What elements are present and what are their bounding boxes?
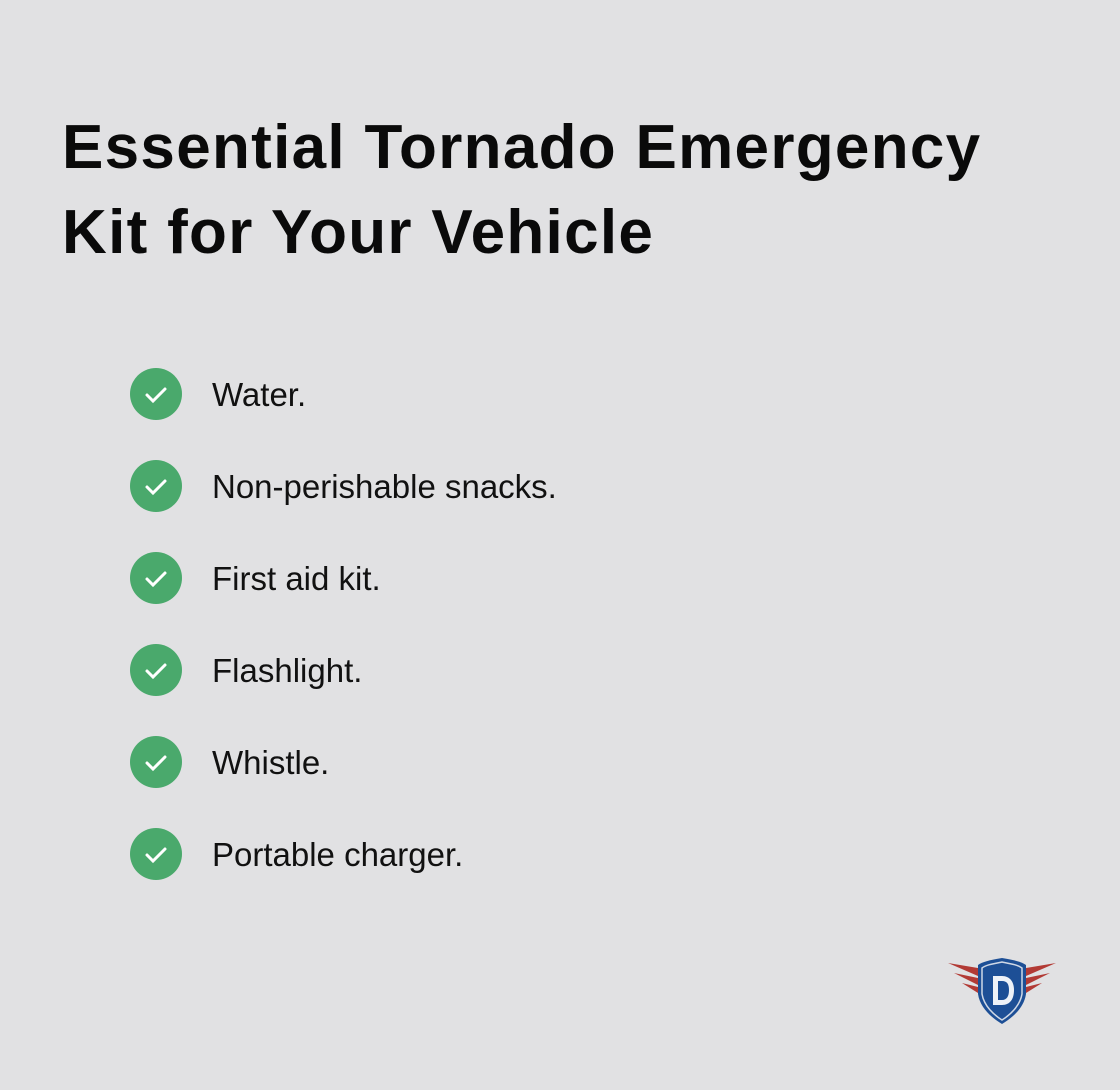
item: whistle: Whistle.	[212, 744, 329, 781]
item: first aid: First aid kit.	[212, 560, 381, 597]
title: Essential Tornado Emergency	[62, 113, 981, 182]
item: first aid	[130, 552, 381, 604]
item: charger: Portable charger.	[212, 836, 463, 873]
item: snacks	[130, 460, 557, 512]
item: charger	[130, 828, 463, 880]
item: water: Water.	[212, 376, 306, 413]
logo	[948, 958, 1056, 1024]
item: snacks: Non-perishable snacks.	[212, 468, 557, 505]
item: whistle	[130, 736, 329, 788]
item: water	[130, 368, 306, 420]
item: flashlight: Flashlight.	[212, 652, 362, 689]
title: Kit for Your Vehicle	[62, 198, 654, 267]
title	[62, 113, 981, 267]
item: flashlight	[130, 644, 362, 696]
